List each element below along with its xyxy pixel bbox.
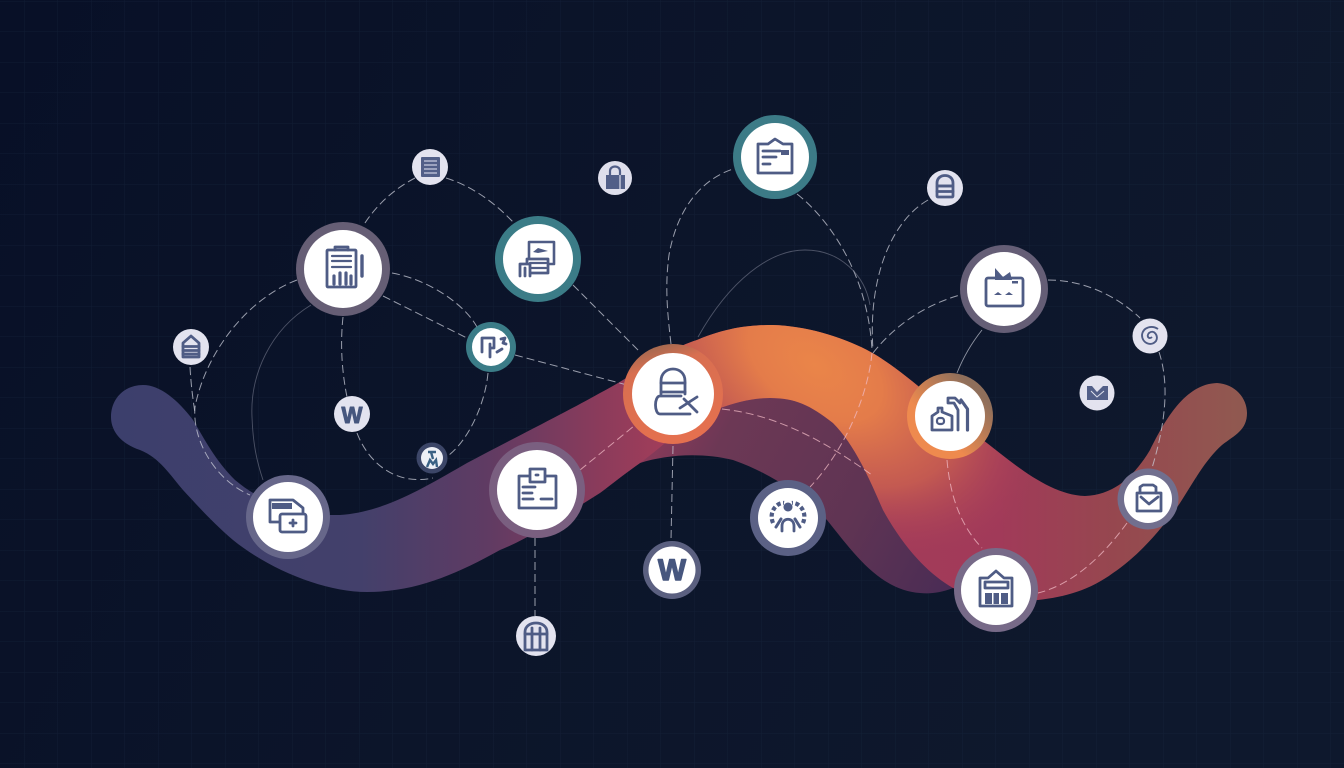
node: envelope check: [1118, 468, 1178, 530]
icon: mini figure: [427, 452, 437, 467]
icon: folders: [270, 500, 306, 532]
icon: signal arrows: [482, 338, 506, 357]
node: wallet card: [960, 245, 1048, 333]
icon: bottle and pipes: [932, 398, 968, 430]
small node: mail: [1080, 376, 1114, 410]
node: documents teal: [495, 216, 581, 302]
icon: building with bars: [980, 571, 1012, 606]
icon: id form: [519, 469, 556, 508]
small node: burger stack: [927, 170, 963, 206]
node: bottles: [907, 373, 993, 459]
small node: spiral: [1132, 318, 1168, 354]
icon: stacked layers: [937, 176, 953, 197]
icon: arched building: [525, 623, 547, 650]
small node: document: [412, 149, 448, 185]
icon: page: [421, 157, 440, 177]
icon: gear figures: [772, 502, 804, 531]
node: people cluster: [750, 480, 826, 556]
small node: stack left: [173, 329, 209, 365]
ribbon: main band: [111, 325, 1247, 600]
small node: bag: [598, 161, 632, 195]
icon: W: W: [342, 402, 363, 428]
icon: spiral: [1142, 327, 1158, 344]
node: W badge large: [643, 541, 701, 599]
node: small teal connector: [466, 322, 516, 372]
icon: archive layers: [183, 336, 199, 357]
icon: padlock with cross: [656, 369, 697, 414]
node: top notice board: [733, 115, 817, 199]
icon: clipboard with chart: [327, 247, 362, 287]
small node: dark figure: [416, 442, 448, 474]
node: form card: [489, 442, 585, 538]
node: bank chart: [954, 548, 1038, 632]
icon: stacked documents: [520, 242, 554, 276]
node: central lock: [623, 344, 723, 444]
small node: W badge: [334, 396, 370, 432]
node: folders left: [246, 475, 330, 559]
icon: W: W: [658, 554, 687, 587]
connector lines: [190, 169, 1165, 616]
icon: card with factory roof: [986, 268, 1023, 306]
node: clipboard report: [296, 222, 390, 316]
flowing ribbon: [111, 325, 1247, 600]
ribbon: dark back band: [610, 365, 953, 593]
small node: arch: [516, 616, 556, 656]
icon: open envelope: [1137, 485, 1161, 511]
icon: notice card: [758, 139, 792, 173]
icon: padlock bag: [606, 166, 625, 189]
icon: dark envelope: [1087, 386, 1108, 400]
